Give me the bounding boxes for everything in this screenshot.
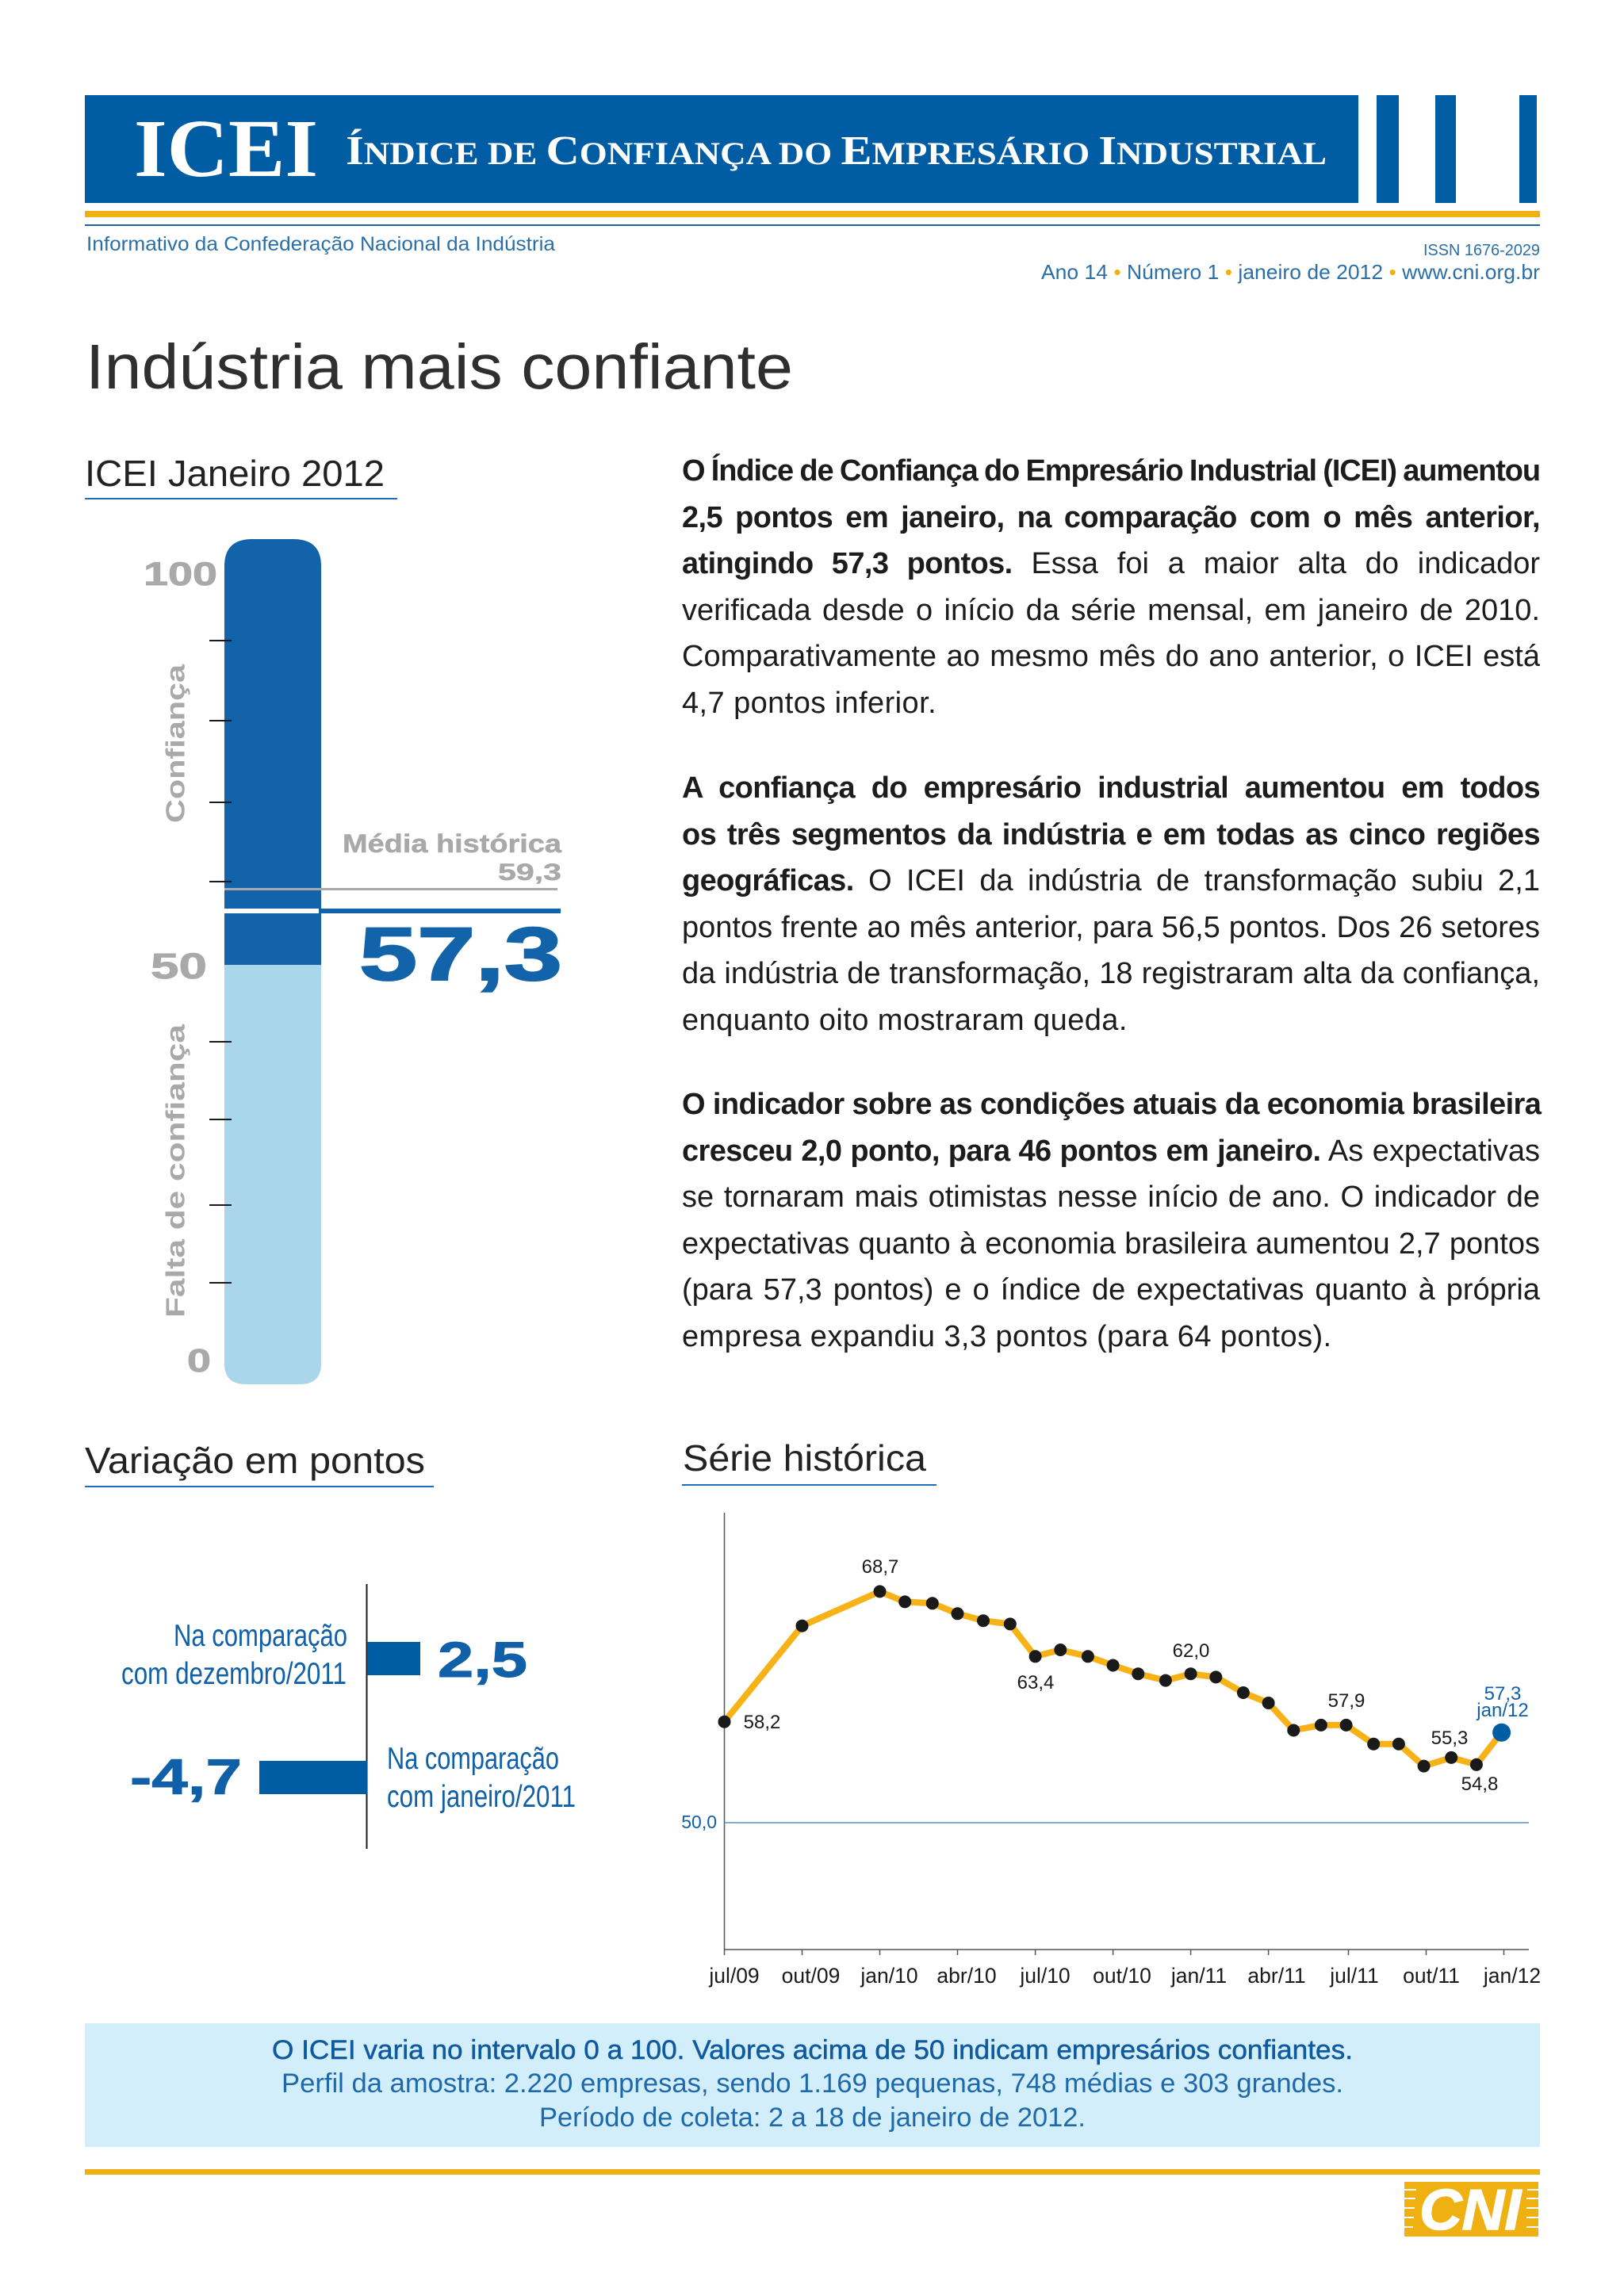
historical average line xyxy=(224,888,557,890)
data labels: 58,2 xyxy=(744,1712,780,1733)
heading: Variação em pontos: Variação em pontos xyxy=(85,1440,425,1481)
label: comparação dezembro: com dezembro/2011 xyxy=(121,1657,347,1691)
axis label: Falta de confiança: Falta de confiança xyxy=(161,1024,190,1318)
text block: paragraph 1: 4,7 pontos inferior. xyxy=(682,687,936,720)
scale ticks xyxy=(209,641,232,1283)
text block: paragraph 1 xyxy=(682,453,1540,720)
label: comparação janeiro: Na comparação xyxy=(387,1742,559,1776)
bar: -4,7 xyxy=(259,1761,367,1794)
bar: +2,5 xyxy=(367,1642,420,1675)
x axis labels: abr/10 xyxy=(936,1964,997,1988)
text block: paragraph 1: O Índice de Confiança do Empresário Industrial (ICEI) aumentou xyxy=(682,454,1540,488)
x axis labels: jan/12 xyxy=(1483,1964,1541,1988)
axis label: Confiança: Confiança xyxy=(161,664,190,823)
x axis labels: out/10 xyxy=(1093,1964,1151,1988)
logo text: ICEI: ICEI xyxy=(134,103,318,194)
data labels xyxy=(744,1556,1498,1795)
x axis labels: jan/10 xyxy=(860,1964,918,1988)
current point marker xyxy=(1492,1724,1511,1742)
value: 59,3: 59,3 xyxy=(498,859,561,886)
series line xyxy=(725,1591,1502,1766)
text block: paragraph 2: da indústria de transformação, 18 registraram alta da confiança, xyxy=(682,957,1540,990)
x axis labels: jul/10 xyxy=(1019,1964,1071,1988)
text block: paragraph 3: empresa expandiu 3,3 pontos (para 64 pontos). xyxy=(682,1319,1332,1353)
reference label 50,0: 50,0 xyxy=(681,1812,717,1832)
x axis labels: jul/09 xyxy=(708,1964,760,1988)
x axis labels xyxy=(708,1964,1541,1988)
thermometer bar xyxy=(224,539,321,1384)
data labels: 63,4 xyxy=(1017,1672,1054,1693)
text block: paragraph 3 xyxy=(682,1088,1542,1353)
scale label 100: 100 xyxy=(144,555,217,592)
x axis labels: jan/11 xyxy=(1170,1964,1227,1988)
text block: paragraph 2: enquanto oito mostraram queda. xyxy=(682,1004,1128,1037)
info line 3: Período de coleta: 2 a 18 de janeiro de 2012. xyxy=(539,2103,1086,2133)
text block: paragraph 3: (para 57,3 pontos) e o índice de expectativas quanto à própria xyxy=(682,1273,1540,1307)
data labels: 54,8 xyxy=(1461,1774,1498,1795)
latest value label: 57,3 xyxy=(1484,1683,1521,1705)
value: 2,5: 2,5 xyxy=(438,1632,527,1688)
axis line xyxy=(366,1584,368,1849)
scale label 0: 0 xyxy=(187,1342,211,1379)
chart axes xyxy=(725,1513,1529,1955)
text block: paragraph 2: geográficas. O ICEI da indústria de transformação subiu 2,1 xyxy=(682,864,1540,897)
latest value label: jan/12 xyxy=(1476,1700,1529,1721)
x axis labels: out/11 xyxy=(1403,1964,1460,1988)
header banner xyxy=(85,95,1537,203)
latest value label xyxy=(1476,1683,1529,1721)
text block: paragraph 3: cresceu 2,0 ponto, para 46 pontos em janeiro. As expectativas xyxy=(682,1134,1540,1167)
heading: Série histórica: Série histórica xyxy=(683,1437,926,1479)
label: comparação dezembro: Na comparação xyxy=(174,1619,347,1653)
text block: paragraph 1: 2,5 pontos em janeiro, na comparação com o mês anterior, xyxy=(682,501,1540,534)
text block: paragraph 2 xyxy=(682,771,1540,1037)
scale label 50: 50 xyxy=(151,946,207,986)
ISSN: ISSN 1676-2029 xyxy=(1423,242,1540,259)
current value marker xyxy=(224,909,561,913)
heading: ICEI Janeiro 2012: ICEI Janeiro 2012 xyxy=(85,453,385,494)
info box xyxy=(85,2023,1540,2147)
text block: paragraph 2: pontos frente ao mês anterior, para 56,5 pontos. Dos 26 setores xyxy=(682,910,1540,943)
banner title: ÍNDICE DE CONFIANÇA DO EMPRESÁRIO INDUSTRIAL xyxy=(346,128,1327,174)
issue line: Ano 14 • Número 1 • janeiro de 2012 • www.cni.org.br xyxy=(1041,260,1540,284)
label: comparação dezembro xyxy=(121,1619,347,1691)
logo: CNI: CNI xyxy=(1419,2179,1522,2242)
label: comparação janeiro xyxy=(387,1742,576,1814)
text block: paragraph 2: A confiança do empresário industrial aumentou em todos xyxy=(682,771,1540,805)
value: -4,7: -4,7 xyxy=(130,1750,242,1805)
reference line 50,0 xyxy=(725,1822,1529,1823)
text block: paragraph 1: verificada desde o início da série mensal, em janeiro de 2010. xyxy=(682,593,1540,626)
info line 2: Perfil da amostra: 2.220 empresas, sendo 1.169 pequenas, 748 médias e 303 grandes. xyxy=(282,2068,1343,2099)
text block: paragraph 2: os três segmentos da indústria e em todas as cinco regiões xyxy=(682,818,1540,851)
value: 57,3: 57,3 xyxy=(359,913,562,997)
panel: série histórica xyxy=(681,1437,1541,1988)
x axis labels: abr/11 xyxy=(1247,1964,1306,1988)
text block: paragraph 3: O indicador sobre as condições atuais da economia brasileira xyxy=(682,1088,1541,1121)
main title: Indústria mais confiante xyxy=(86,331,793,402)
panel: variação em pontos xyxy=(85,1440,576,1849)
text block: paragraph 1: atingindo 57,3 pontos. Essa foi a maior alta do indicador xyxy=(682,547,1540,580)
data labels: 68,7 xyxy=(862,1556,898,1578)
x axis labels: out/09 xyxy=(782,1964,840,1988)
panel: thermometer ICEI Janeiro 2012 xyxy=(85,453,562,1384)
label: comparação janeiro: com janeiro/2011 xyxy=(387,1780,576,1814)
info line 1: O ICEI varia no intervalo 0 a 100. Valores acima de 50 indicam empresários confiantes. xyxy=(272,2035,1353,2065)
text block: paragraph 3: expectativas quanto à economia brasileira aumentou 2,7 pontos xyxy=(682,1227,1540,1261)
series markers xyxy=(718,1585,1483,1773)
publisher line: Informativo da Confederação Nacional da Indústria xyxy=(86,233,555,255)
text block: paragraph 1: Comparativamente ao mesmo mês do ano anterior, o ICEI está xyxy=(682,640,1540,673)
text block: paragraph 3: se tornaram mais otimistas nesse início de ano. O indicador de xyxy=(682,1181,1540,1214)
data labels: 57,9 xyxy=(1328,1690,1365,1712)
x axis labels: jul/11 xyxy=(1329,1964,1379,1988)
data labels: 55,3 xyxy=(1431,1728,1468,1749)
data labels: 62,0 xyxy=(1173,1640,1209,1662)
label: Média histórica: Média histórica xyxy=(343,829,561,858)
